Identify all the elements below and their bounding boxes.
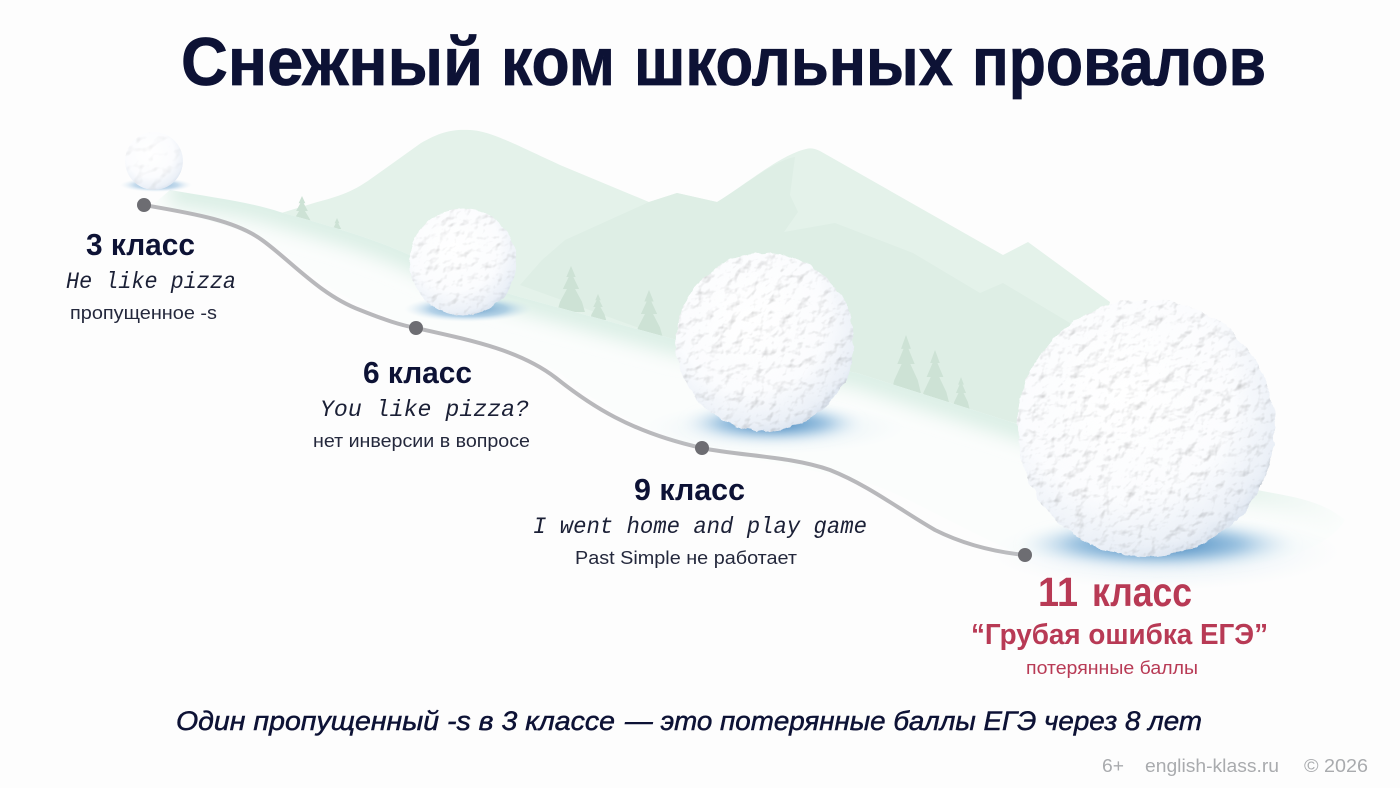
text block: 11th grade: потерянные баллы bbox=[1026, 658, 1198, 678]
footer: 6+ bbox=[1102, 756, 1124, 776]
title: Снежный bbox=[181, 24, 483, 100]
mountain range illustration bbox=[278, 130, 1110, 440]
title bbox=[181, 24, 1266, 100]
footer bbox=[1102, 756, 1368, 776]
progress curve bbox=[144, 205, 1025, 555]
text block: 11th grade: класс bbox=[1092, 569, 1192, 615]
curve marker 11th grade bbox=[1018, 548, 1032, 562]
title: провалов bbox=[972, 24, 1266, 100]
conclusion sentence: Один пропущенный -s в 3 классе bbox=[176, 706, 615, 736]
text block: 6th grade: 6 класс bbox=[363, 355, 472, 390]
snowball 6th grade bbox=[404, 208, 532, 322]
text block: 11th grade bbox=[971, 569, 1268, 678]
snow slope bbox=[163, 190, 1315, 510]
snowball 11th grade bbox=[990, 299, 1340, 590]
pine trees bbox=[292, 196, 970, 409]
text block: 3rd grade: 3 класс bbox=[86, 227, 195, 262]
title: школьных bbox=[634, 24, 953, 100]
text block: 9th grade: 9 класс bbox=[634, 472, 745, 507]
title: ком bbox=[501, 24, 615, 100]
text block: 6th grade: You like pizza? bbox=[320, 397, 529, 423]
snowball 3rd grade bbox=[120, 132, 192, 192]
text block: 9th grade: Past Simple не работает bbox=[575, 547, 798, 568]
footer: © 2026 bbox=[1304, 756, 1368, 776]
far mountain bbox=[278, 130, 1110, 440]
text block: 3rd grade: He like pizza bbox=[66, 269, 236, 295]
text block: 11th grade: 11 bbox=[1038, 569, 1078, 615]
text block: 3rd grade bbox=[66, 227, 236, 323]
conclusion sentence: — это потерянные баллы ЕГЭ через 8 лет bbox=[624, 706, 1202, 736]
text block: 11th grade: “Грубая ошибка ЕГЭ” bbox=[971, 619, 1268, 651]
footer: english-klass.ru bbox=[1145, 756, 1279, 776]
text block: 9th grade: I went home and play game bbox=[533, 514, 867, 540]
curve marker 6th grade bbox=[409, 321, 423, 335]
text block: 3rd grade: пропущенное -s bbox=[70, 303, 217, 323]
curve marker 9th grade bbox=[695, 441, 709, 455]
text block: 6th grade: нет инверсии в вопросе bbox=[313, 431, 530, 451]
conclusion sentence bbox=[176, 706, 1202, 736]
text block: 6th grade bbox=[313, 355, 530, 451]
middle mountain layer bbox=[520, 157, 1090, 440]
text block: 9th grade bbox=[533, 472, 867, 568]
snowball 9th grade bbox=[645, 253, 905, 454]
curve marker 3rd grade bbox=[137, 198, 151, 212]
